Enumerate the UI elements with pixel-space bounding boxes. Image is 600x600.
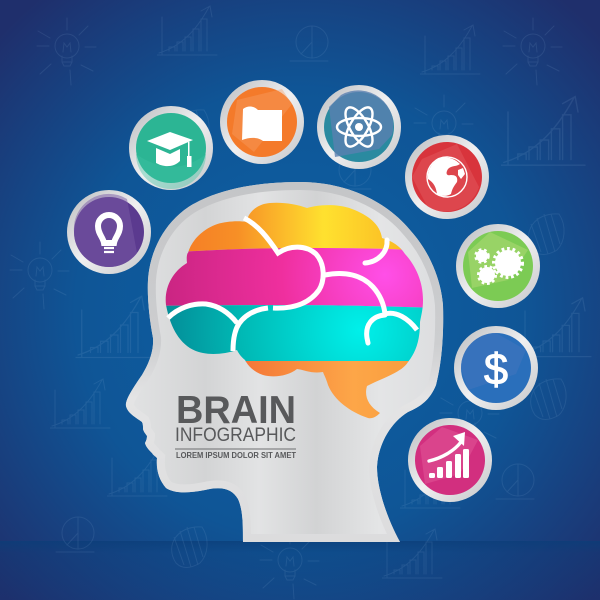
icon: cap (147, 132, 193, 167)
subtitle: LOREM IPSUM DOLOR SIT AMET (176, 450, 297, 460)
icon button: gears (456, 224, 540, 308)
icon: bulb (98, 215, 120, 252)
icon: dollar sign: $ (484, 345, 508, 394)
brain (166, 202, 423, 418)
icon button: growth chart (408, 418, 492, 502)
icon: chart (429, 432, 469, 478)
icon: gears (476, 250, 521, 283)
icon: atom symbol (337, 103, 381, 151)
heading: INFOGRAPHIC: INFOGRAPHIC (175, 424, 296, 446)
head silhouette (126, 182, 443, 542)
icon button: light bulb (67, 190, 151, 274)
brain colour bands (166, 202, 423, 418)
icon button: graduation cap (129, 106, 213, 190)
icon button: open book (220, 80, 304, 164)
heading: BRAIN: BRAIN (176, 389, 296, 432)
floor band (0, 541, 600, 600)
icon: book (242, 106, 282, 141)
brain fold lines (168, 218, 417, 351)
icon button: dollar (454, 326, 538, 410)
icon: globe (427, 157, 467, 197)
icon button: atom (317, 85, 401, 169)
icon button: globe (405, 135, 489, 219)
